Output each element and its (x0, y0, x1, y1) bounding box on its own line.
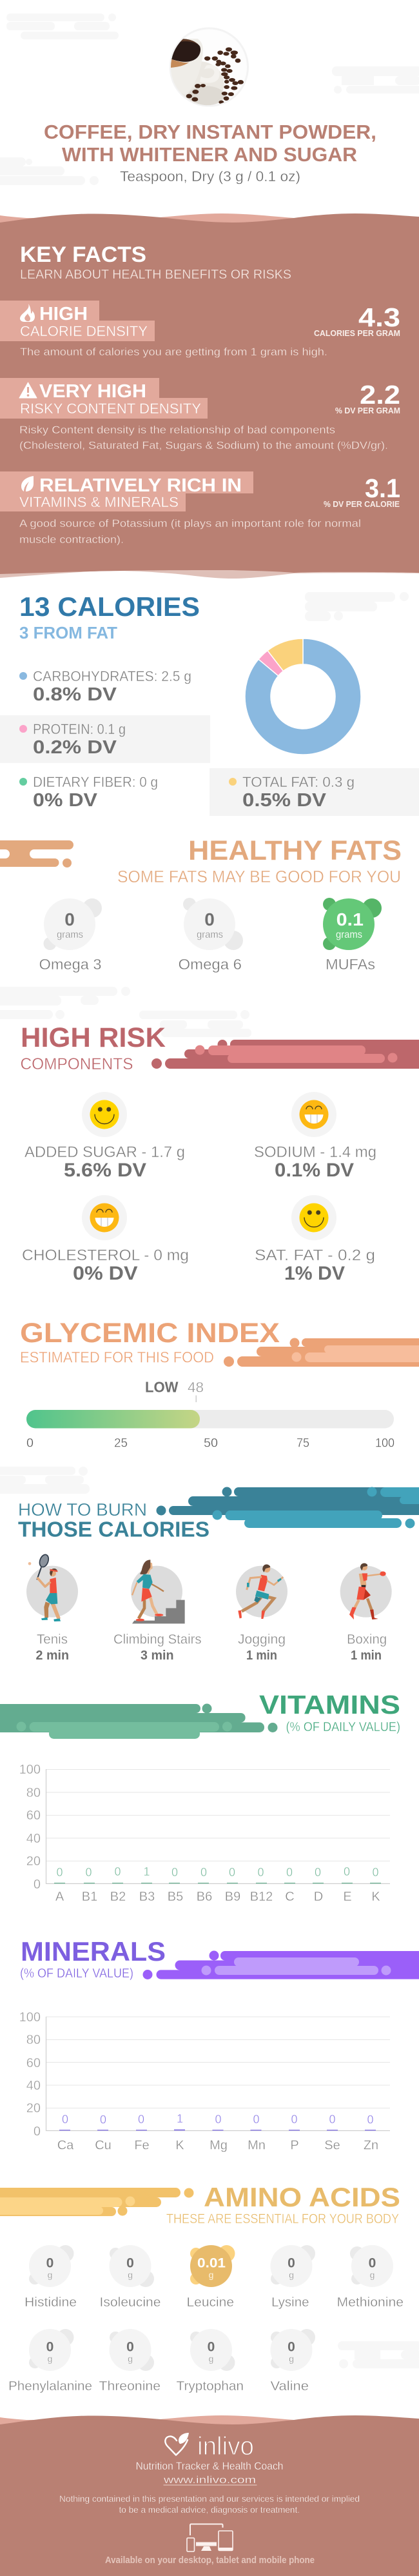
amino: phenylalanine: Phenylalanine (8, 2379, 92, 2393)
fat: omega 3 (39, 898, 102, 973)
glycemic index heading: GLYCEMIC INDEX (20, 1318, 280, 1349)
calories heading (19, 591, 200, 642)
risk item: cholesterol: CHOLESTEROL - 0 mg (22, 1247, 189, 1264)
panel: how to burn those calories (18, 1487, 419, 1663)
chart: minerals bar chart: 100 (19, 2010, 41, 2025)
chart: vitamins bar chart (19, 1763, 390, 1904)
icon: desktop, tablet and phone (187, 2524, 233, 2551)
chart: minerals bar chart: 0 (100, 2113, 106, 2126)
burn heading: HOW TO BURN (18, 1500, 147, 1520)
amino: threonine (99, 2329, 161, 2393)
amino: histidine (24, 2245, 77, 2310)
key facts heading (20, 243, 291, 282)
footer tagline and website: www.inlivo.com (163, 2475, 256, 2486)
panel: amino acids (0, 2182, 404, 2393)
chart: minerals bar chart: Fe (134, 2139, 150, 2153)
chart: vitamins bar chart: 0 (85, 1866, 92, 1879)
panel: healthy fats (0, 835, 402, 973)
risk item: saturated fat (255, 1195, 375, 1284)
chart: vitamins bar chart: 40 (26, 1832, 41, 1846)
footer (0, 2415, 419, 2576)
fact: calorie density: The amount of calories you are getting from 1 gram is high. (20, 346, 327, 358)
fact: calorie density: 4.3 (358, 302, 400, 332)
amino: valine: g (289, 2353, 294, 2364)
fact: vitamins and minerals: % DV PER CALORIE (324, 500, 400, 509)
fat: omega 6: 0 (204, 909, 215, 929)
fact: calorie density: HIGH (39, 304, 88, 324)
glycemic score (145, 1379, 204, 1402)
decoration: glycemic streaks (224, 1338, 419, 1367)
decoration: healthy fats streaks (0, 840, 73, 867)
chart: minerals bar chart: 0 (215, 2113, 222, 2126)
vitamins heading (259, 1690, 400, 1734)
risk item: cholesterol (22, 1195, 189, 1284)
high risk heading (21, 1022, 166, 1073)
amino: histidine: 0 (46, 2256, 54, 2270)
chart: vitamins bar chart: 0 (34, 1878, 41, 1892)
amino: tryptophan: g (209, 2353, 213, 2364)
amino: tryptophan: Tryptophan (177, 2379, 244, 2393)
chart: minerals bar chart: K (175, 2139, 184, 2153)
icon: boxer (340, 1563, 392, 1620)
icon: smile face (90, 1100, 119, 1129)
glycemic gauge: 100 (375, 1437, 395, 1450)
amino acids heading: AMINO ACIDS (204, 2182, 400, 2212)
fat: MUFAs (323, 898, 382, 973)
serving size: Teaspoon, Dry (3 g / 0.1 oz) (120, 168, 300, 184)
chart: vitamins bar chart: 0 (114, 1865, 121, 1878)
amino: valine: Valine (271, 2379, 309, 2393)
amino: isoleucine (99, 2245, 161, 2310)
panel: high risk components (21, 1022, 419, 1284)
amino: methionine: g (370, 2270, 375, 2280)
chart: vitamins bar chart: 1 (143, 1865, 150, 1878)
fact: risky content density: 2.2 (360, 380, 400, 410)
icon: grin face (90, 1204, 119, 1232)
chart: vitamins bar chart: 0 (56, 1866, 63, 1879)
chart: minerals bar chart: 60 (26, 2056, 41, 2070)
chart: minerals bar chart: Ca (57, 2139, 74, 2153)
chart: vitamins bar chart: A (55, 1890, 64, 1904)
fact: vitamins and minerals: 3.1 (365, 473, 400, 503)
fact: vitamins and minerals: VITAMINS & MINERALS (19, 494, 179, 510)
legend: dietary fiber (19, 774, 158, 811)
fact: risky content density: Risky Content density is the relationship of bad components (19, 424, 335, 436)
legend: protein: PROTEIN: 0.1 g (33, 721, 126, 737)
amino: isoleucine: g (128, 2270, 133, 2280)
fact: risky content density: (Cholesterol, Saturated Fat, Sugars & Sodium) to the amount (%DV/gr). (19, 439, 388, 451)
legend: protein: 0.2% DV (33, 737, 117, 758)
chart: vitamins bar chart: E (343, 1890, 352, 1904)
fat: omega 6 (178, 898, 243, 973)
donut chart (245, 639, 361, 755)
chart: vitamins bar chart: 80 (26, 1786, 41, 1800)
chart: minerals bar chart: 40 (26, 2079, 41, 2093)
logo: inlivo heart: inlivo (197, 2432, 254, 2461)
legend: protein (0, 715, 210, 763)
activity: climbing stairs: Climbing Stairs (113, 1632, 201, 1647)
risk item: saturated fat: SAT. FAT - 0.2 g (255, 1247, 375, 1264)
chart: vitamins bar chart: 0 (372, 1866, 379, 1879)
panel: vitamins (0, 1690, 400, 1904)
decoration: amber streaks (0, 2188, 193, 2216)
amino: leucine: 0.01 (197, 2256, 226, 2270)
legend: total fat: 0.5% DV (242, 790, 327, 811)
glycemic index heading: ESTIMATED FOR THIS FOOD (20, 1349, 214, 1366)
fat: omega 6: grams (197, 929, 223, 940)
decoration: green streaks (0, 1704, 277, 1739)
healthy fats heading: SOME FATS MAY BE GOOD FOR YOU (117, 867, 401, 886)
glycemic index heading (20, 1318, 280, 1366)
chart: vitamins bar chart: B12 (250, 1890, 273, 1904)
icon: grin face (299, 1100, 329, 1129)
high risk heading: HIGH RISK (21, 1022, 166, 1053)
amino: threonine: 0 (126, 2340, 134, 2354)
chart: vitamins bar chart: 0 (171, 1866, 178, 1879)
chart: minerals bar chart: Cu (95, 2139, 112, 2153)
disclaimer: Nothing contained in this presentation and our services is intended or implied (59, 2493, 360, 2504)
glycemic gauge: 50 (204, 1437, 218, 1450)
chart: vitamins bar chart: K (371, 1890, 380, 1904)
chart: vitamins bar chart: 100 (19, 1763, 41, 1777)
header: food photo, title and serving (44, 27, 376, 184)
panel: calories (0, 591, 419, 816)
chart: vitamins bar chart: 0 (257, 1866, 264, 1879)
panel: key facts (0, 213, 419, 579)
fact: calorie density: CALORIE DENSITY (20, 323, 148, 339)
chart: vitamins bar chart: 20 (26, 1854, 41, 1868)
burn heading: THOSE CALORIES (18, 1517, 210, 1541)
amino: lysine: Lysine (271, 2295, 309, 2310)
title: COFFEE, DRY INSTANT POWDER, (44, 121, 376, 143)
activity: boxing: Boxing (347, 1632, 387, 1647)
title: WITH WHITENER AND SUGAR (62, 143, 357, 166)
chart: minerals bar chart: 0 (329, 2113, 336, 2126)
fact: risky content density: RISKY CONTENT DENSITY (20, 401, 201, 417)
healthy fats heading: HEALTHY FATS (188, 835, 402, 866)
amino: isoleucine: Isoleucine (99, 2295, 161, 2310)
amino: leucine (187, 2245, 235, 2310)
amino: histidine: g (48, 2270, 52, 2280)
amino: valine (271, 2329, 315, 2393)
chart: vitamins bar chart: 0 (229, 1866, 235, 1879)
chart: minerals bar chart: 0 (138, 2113, 144, 2126)
key facts heading: KEY FACTS (20, 243, 146, 267)
fat: MUFAs: grams (336, 929, 362, 940)
burn heading (18, 1500, 210, 1541)
risk item: added sugar: ADDED SUGAR - 1.7 g (24, 1144, 185, 1161)
icon: warning triangle (19, 382, 37, 398)
fat: omega 3: Omega 3 (39, 956, 102, 973)
chart: minerals bar chart: 0 (367, 2113, 374, 2126)
amino: leucine: g (209, 2270, 213, 2280)
amino: histidine: Histidine (24, 2295, 77, 2310)
food photo: coffee cup and beans (170, 27, 249, 107)
activity: jogging: 1 min (246, 1649, 277, 1663)
activity: boxing: 1 min (351, 1649, 382, 1663)
icon: smile face (299, 1204, 329, 1232)
minerals heading (20, 1936, 166, 1981)
activity: tennis: Tenis (37, 1632, 68, 1647)
activity: climbing stairs: 3 min (141, 1649, 174, 1663)
chart: minerals bar chart (19, 2010, 390, 2153)
fact: risky content density: % DV PER GRAM (335, 406, 400, 415)
chart: minerals bar chart: Mg (210, 2139, 228, 2153)
legend: carbohydrates: 0.8% DV (33, 684, 117, 705)
amino: isoleucine: 0 (126, 2256, 134, 2270)
minerals heading: (% OF DAILY VALUE) (20, 1967, 133, 1981)
risk item: cholesterol: 0% DV (73, 1263, 138, 1284)
healthy fats heading (117, 835, 402, 886)
amino: phenylalanine: g (48, 2353, 52, 2364)
legend: total fat: TOTAL FAT: 0.3 g (242, 774, 355, 790)
disclaimer: to be a medical advice, diagnosis or treatment. (119, 2504, 300, 2515)
icon: tennis player (26, 1553, 78, 1621)
fat: omega 3: 0 (64, 909, 75, 929)
panel: minerals (19, 1936, 419, 2153)
amino: tryptophan (177, 2329, 244, 2393)
calories heading: 13 CALORIES (19, 591, 200, 622)
chart: vitamins bar chart: B2 (110, 1890, 126, 1904)
logo: inlivo heart (165, 2432, 254, 2461)
activity: climbing stairs (113, 1560, 201, 1663)
vitamins heading: (% OF DAILY VALUE) (286, 1720, 400, 1734)
amino: tryptophan: 0 (208, 2340, 215, 2354)
glycemic gauge (26, 1410, 395, 1450)
icon: jogger (236, 1565, 287, 1619)
fact: calorie density (0, 301, 400, 358)
decoration: teal streaks (156, 1487, 419, 1529)
disclaimer (59, 2493, 360, 2515)
amino: valine: 0 (287, 2340, 295, 2354)
glycemic gauge: 25 (114, 1437, 128, 1450)
amino: threonine: Threonine (99, 2379, 161, 2393)
activity: jogging: Jogging (238, 1632, 286, 1647)
risk item: added sugar: 5.6% DV (64, 1160, 146, 1181)
amino: methionine (336, 2245, 404, 2310)
activity: tennis (26, 1553, 78, 1663)
chart: vitamins bar chart: 60 (26, 1808, 41, 1823)
decoration: high risk streaks (151, 1040, 419, 1069)
amino: methionine: 0 (369, 2256, 376, 2270)
amino: methionine: Methionine (336, 2295, 404, 2310)
chart: vitamins bar chart: B6 (197, 1890, 212, 1904)
risk item: sodium (254, 1092, 376, 1181)
legend: carbohydrates (19, 668, 191, 705)
amino: lysine (271, 2245, 315, 2310)
fact: calorie density: CALORIES PER GRAM (314, 329, 400, 338)
footer tagline and website (135, 2460, 284, 2486)
activity: jogging (236, 1565, 287, 1663)
chart: vitamins bar chart: 0 (315, 1866, 321, 1879)
fat: MUFAs: 0.1 (336, 909, 364, 929)
legend: dietary fiber: 0% DV (33, 790, 98, 811)
icon: woman climbing stairs (131, 1560, 185, 1623)
availability note: Available on your desktop, tablet and mobile phone (105, 2555, 315, 2566)
amino acids heading (166, 2182, 400, 2226)
amino: phenylalanine (8, 2329, 92, 2393)
glycemic gauge: 0 (26, 1437, 34, 1450)
chart: vitamins bar chart: D (314, 1890, 323, 1904)
high risk heading: COMPONENTS (21, 1055, 133, 1073)
fat: omega 3: grams (57, 929, 83, 940)
chart: vitamins bar chart: 0 (200, 1866, 207, 1879)
fact: risky content density (0, 378, 400, 451)
chart: minerals bar chart: 0 (62, 2113, 68, 2126)
chart: minerals bar chart: 0 (291, 2113, 298, 2126)
decoration: purple streaks (143, 1950, 419, 1979)
chart: vitamins bar chart: B3 (139, 1890, 155, 1904)
activity: boxing (340, 1563, 392, 1663)
risk item: sodium: SODIUM - 1.4 mg (254, 1144, 376, 1161)
amino: lysine: 0 (287, 2256, 295, 2270)
activity: tennis: 2 min (36, 1649, 69, 1663)
legend: dietary fiber: DIETARY FIBER: 0 g (33, 774, 158, 790)
legend: total fat (210, 768, 419, 816)
chart: minerals bar chart: 80 (26, 2033, 41, 2047)
risk item: added sugar (24, 1092, 185, 1181)
chart: minerals bar chart: Mn (248, 2139, 266, 2153)
chart: vitamins bar chart: 0 (286, 1866, 293, 1879)
chart: vitamins bar chart: C (285, 1890, 295, 1904)
fat: MUFAs: MUFAs (326, 956, 375, 973)
icon: leaf (21, 476, 34, 491)
chart: vitamins bar chart: B1 (82, 1890, 97, 1904)
glycemic gauge: 75 (297, 1437, 309, 1450)
legend: carbohydrates: CARBOHYDRATES: 2.5 g (33, 668, 191, 684)
chart: minerals bar chart: P (290, 2139, 299, 2153)
chart: vitamins bar chart: B9 (225, 1890, 240, 1904)
icon: flame (20, 304, 35, 322)
vitamins heading: VITAMINS (259, 1690, 400, 1719)
title (44, 121, 376, 166)
chart: minerals bar chart: 0 (253, 2113, 260, 2126)
fact: vitamins and minerals (0, 471, 400, 546)
fact: vitamins and minerals: A good source of Potassium (it plays an important role for normal (19, 517, 361, 530)
glycemic score: LOW (145, 1379, 179, 1396)
risk item: saturated fat: 1% DV (284, 1263, 345, 1284)
chart: minerals bar chart: Se (324, 2139, 340, 2153)
fact: vitamins and minerals: muscle contraction). (19, 533, 124, 546)
fact: risky content density: VERY HIGH (39, 381, 146, 402)
chart: minerals bar chart: 20 (26, 2101, 41, 2115)
chart: vitamins bar chart: 0 (344, 1865, 350, 1878)
chart: vitamins bar chart: B5 (168, 1890, 183, 1904)
amino: leucine: Leucine (187, 2295, 234, 2310)
fact: vitamins and minerals: RELATIVELY RICH IN (39, 475, 242, 496)
chart: minerals bar chart: Zn (364, 2139, 378, 2153)
calories heading: 3 FROM FAT (19, 623, 117, 642)
risk item: sodium: 0.1% DV (275, 1160, 354, 1181)
panel: glycemic index (20, 1318, 419, 1450)
amino: phenylalanine: 0 (46, 2340, 54, 2354)
chart: minerals bar chart: 0 (34, 2125, 41, 2139)
chart: minerals bar chart: 1 (177, 2112, 183, 2125)
amino: threonine: g (128, 2353, 133, 2364)
glycemic score: 48 (188, 1379, 204, 1396)
key facts heading: LEARN ABOUT HEALTH BENEFITS OR RISKS (20, 268, 291, 282)
minerals heading: MINERALS (21, 1936, 166, 1967)
footer tagline and website: Nutrition Tracker & Health Coach (135, 2460, 284, 2472)
fat: omega 6: Omega 6 (178, 956, 242, 973)
amino: lysine: g (289, 2270, 294, 2280)
